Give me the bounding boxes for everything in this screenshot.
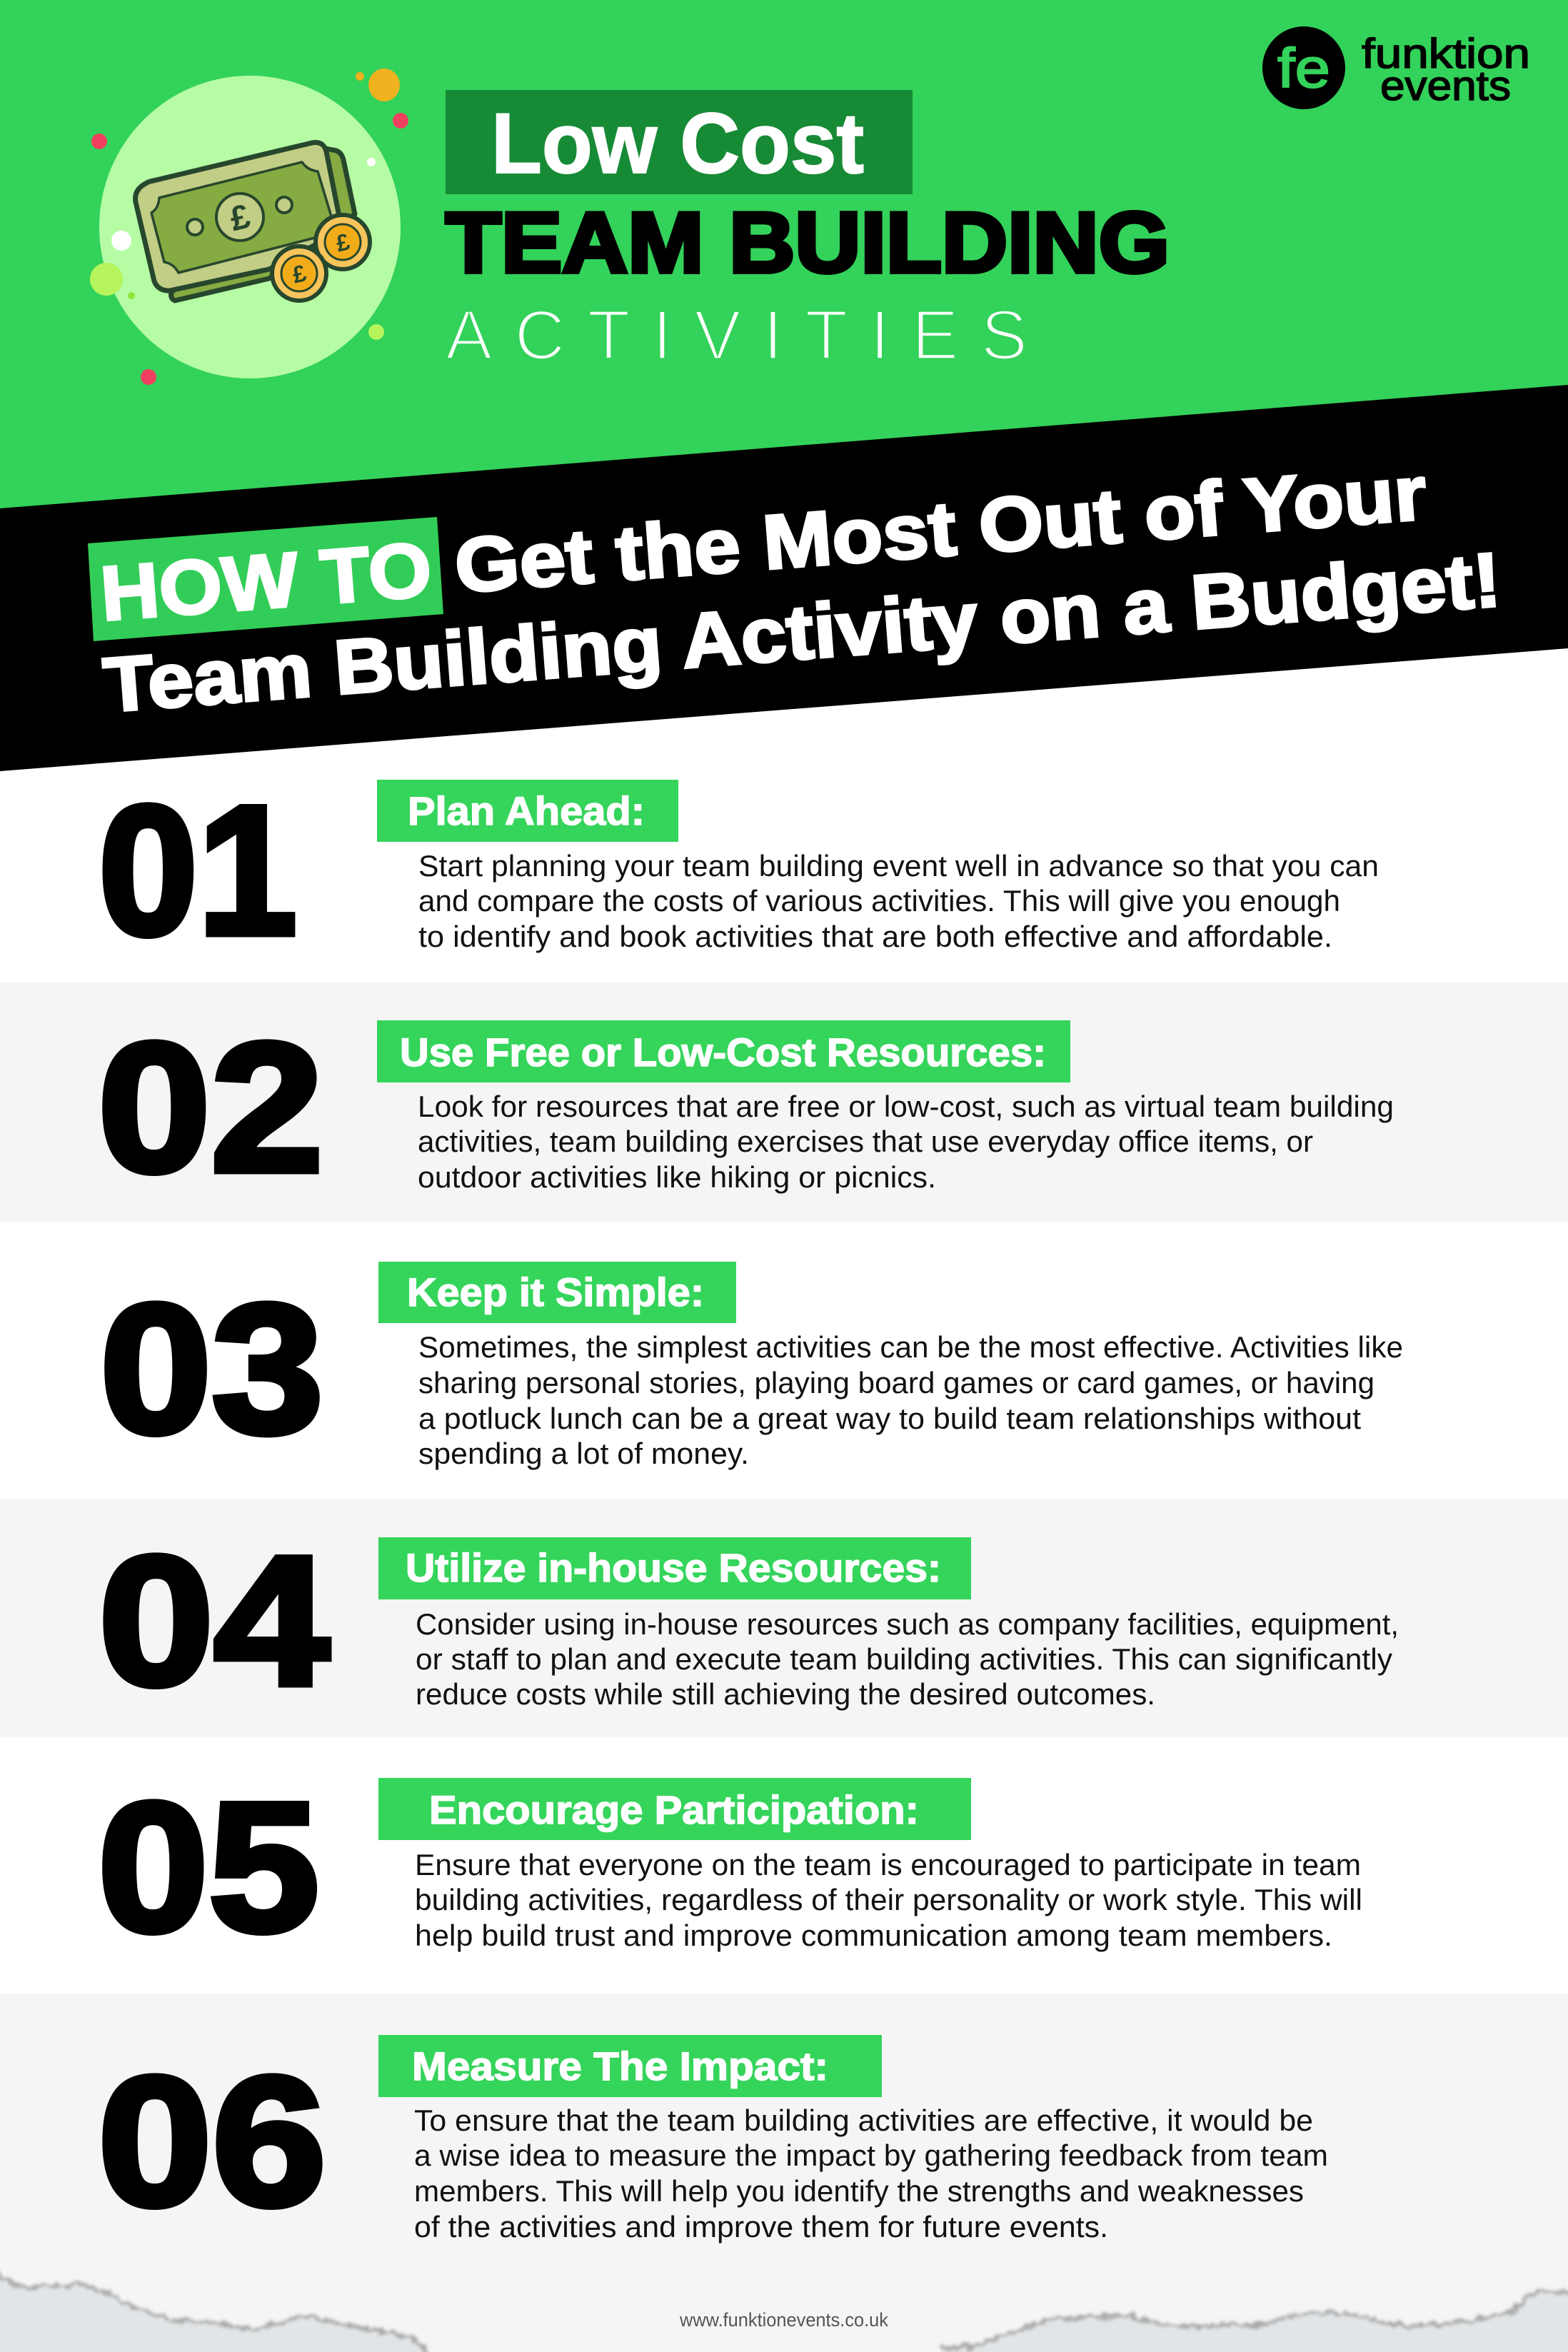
body text: or staff to plan and execute team building activities. This can significantly xyxy=(416,1642,1392,1676)
body text xyxy=(415,1848,1362,1952)
body text: Consider using in-house resources such as company facilities, equipment, xyxy=(416,1607,1399,1641)
body text xyxy=(414,2104,1328,2243)
step 04 xyxy=(99,1517,1399,1724)
body text: building activities, regardless of their personality or work style. This will xyxy=(415,1883,1362,1916)
logo: funktion events: fe xyxy=(1277,36,1330,99)
body text: help build trust and improve communication among team members. xyxy=(415,1919,1332,1952)
step 03 xyxy=(100,1262,1403,1472)
title: TEAM BUILDING: TEAM BUILDING xyxy=(446,195,1170,291)
body text: Look for resources that are free or low-cost, such as virtual team building xyxy=(418,1090,1394,1123)
heading: Plan Ahead: Plan Ahead: xyxy=(408,788,645,833)
body text: a wise idea to measure the impact by gathering feedback from team xyxy=(414,2139,1328,2172)
title: ACTIVITIES: ACTIVITIES xyxy=(446,296,1027,374)
alternating row backgrounds xyxy=(0,982,1568,2352)
step 06 xyxy=(98,2035,1328,2244)
heading: Use Free or Low-Cost Resources xyxy=(377,1020,1070,1082)
number 03: 03 xyxy=(100,1265,323,1472)
number 04: 04 xyxy=(99,1517,331,1724)
logo: funktion events xyxy=(1262,26,1530,109)
body text: spending a lot of money. xyxy=(418,1437,749,1470)
heading: Utilize in-house Resources xyxy=(378,1537,971,1599)
illustration: banknote and coins: £ xyxy=(333,228,353,257)
body text: Sometimes, the simplest activities can be the most effective. Activities like xyxy=(418,1330,1403,1364)
body text xyxy=(418,1330,1403,1470)
heading line one: Get the Most Out of Your xyxy=(452,449,1429,609)
step 02 xyxy=(98,1004,1394,1210)
heading: Keep it Simple xyxy=(378,1262,736,1323)
heading: Encourage Participation: Encourage Participation: xyxy=(429,1787,919,1832)
heading: Measure The Impact xyxy=(378,2035,882,2097)
body text xyxy=(418,849,1379,953)
heading: Keep it Simple: Keep it Simple: xyxy=(407,1270,704,1315)
body text xyxy=(418,1090,1394,1194)
footer url: www.funktionevents.co.uk xyxy=(679,2309,888,2331)
body text: Start planning your team building event well in advance so that you can xyxy=(418,849,1379,883)
body text: of the activities and improve them for future events. xyxy=(414,2210,1108,2243)
step 05 xyxy=(98,1764,1362,1970)
body text: sharing personal stories, playing board games or card games, or having xyxy=(418,1366,1374,1399)
number 05: 05 xyxy=(98,1764,319,1970)
illustration: banknote and coins xyxy=(90,69,408,385)
body text xyxy=(416,1607,1399,1711)
illustration: banknote and coins: £ xyxy=(290,259,309,288)
body text: activities, team building exercises that use everyday office items, or xyxy=(418,1125,1313,1158)
title: Low Cost: Low Cost xyxy=(491,96,864,191)
number 02: 02 xyxy=(98,1004,323,1210)
number 01: 01 xyxy=(99,767,297,973)
header panel xyxy=(0,0,1568,514)
heading: Use Free or Low-Cost Resources: Use Free or Low-Cost Resources: xyxy=(400,1030,1046,1075)
highlight: HOW TO: HOW TO xyxy=(98,526,434,637)
illustration: banknote and coins: £ xyxy=(226,198,254,238)
step 01 xyxy=(99,767,1379,973)
heading line two: Team Building Activity on a Budget! xyxy=(101,536,1504,728)
body text: and compare the costs of various activities. This will give you enough xyxy=(418,884,1340,918)
logo: funktion events: funktion xyxy=(1362,31,1530,77)
logo: funktion events: events xyxy=(1380,63,1511,109)
body text: to identify and book activities that are both effective and affordable. xyxy=(418,920,1332,953)
body text: Ensure that everyone on the team is encouraged to participate in team xyxy=(415,1848,1361,1881)
body text: members. This will help you identify the strengths and weaknesses xyxy=(414,2174,1304,2208)
heading: Utilize in-house Resources: Utilize in-house Resources: xyxy=(406,1545,941,1590)
torn paper edge at bottom xyxy=(0,2267,1568,2352)
heading: Plan Ahead xyxy=(377,780,678,842)
body text: reduce costs while still achieving the desired outcomes. xyxy=(416,1677,1155,1711)
body text: To ensure that the team building activities are effective, it would be xyxy=(414,2104,1313,2137)
number 06: 06 xyxy=(98,2038,326,2244)
heading: Encourage Participation xyxy=(378,1778,971,1840)
heading: Measure The Impact: Measure The Impact: xyxy=(412,2044,828,2089)
body text: a potluck lunch can be a great way to build team relationships without xyxy=(418,1402,1361,1435)
black diagonal banner xyxy=(0,385,1568,771)
body text: outdoor activities like hiking or picnics. xyxy=(418,1160,936,1194)
